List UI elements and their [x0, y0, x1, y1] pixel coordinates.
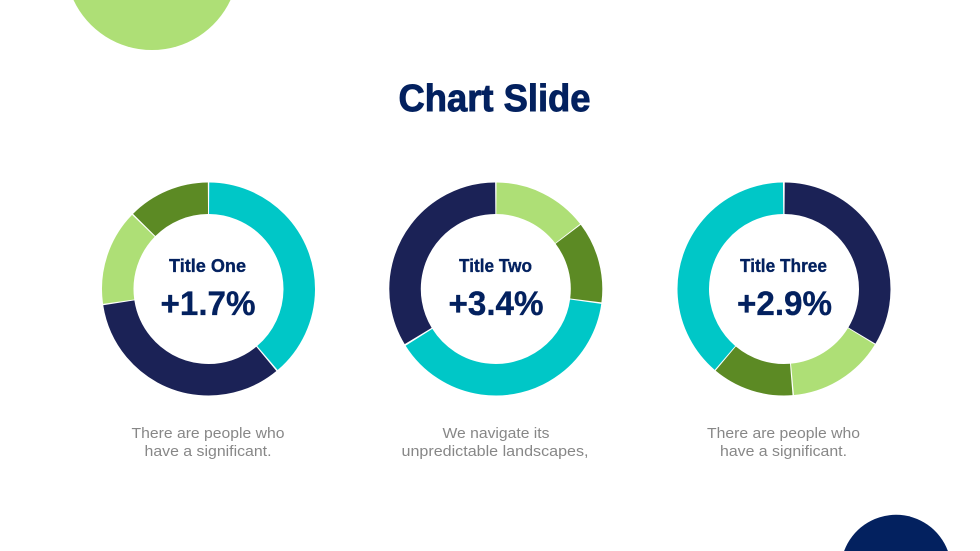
- chart one description: [132, 425, 284, 460]
- chart one description: There are people who: [132, 425, 284, 442]
- panel: chart three: [656, 161, 912, 460]
- chart one value: +1.7%: [160, 285, 256, 323]
- chart three description: have a significant.: [720, 443, 847, 460]
- chart two heading: Title Two: [459, 256, 532, 276]
- donut chart one: [80, 161, 337, 417]
- chart three description: [707, 425, 860, 460]
- chart one description: have a significant.: [144, 443, 272, 460]
- panel: chart two: [369, 162, 623, 460]
- donut chart three: [656, 161, 912, 417]
- chart two description: We navigate its: [442, 425, 550, 442]
- decorative circle: bottom navy: [844, 515, 948, 551]
- chart three heading: Title Three: [740, 256, 827, 276]
- title: Chart Slide: [398, 78, 590, 120]
- chart one heading: Title One: [169, 256, 246, 276]
- chart three value: +2.9%: [737, 285, 832, 323]
- chart three description: There are people who: [707, 425, 860, 442]
- decorative circle: top green: [74, 0, 230, 50]
- chart two value: +3.4%: [448, 285, 544, 323]
- chart two description: unpredictable landscapes,: [402, 443, 588, 460]
- panel: chart one: [80, 161, 337, 460]
- donut chart two: [369, 162, 623, 416]
- chart two description: [402, 425, 588, 460]
